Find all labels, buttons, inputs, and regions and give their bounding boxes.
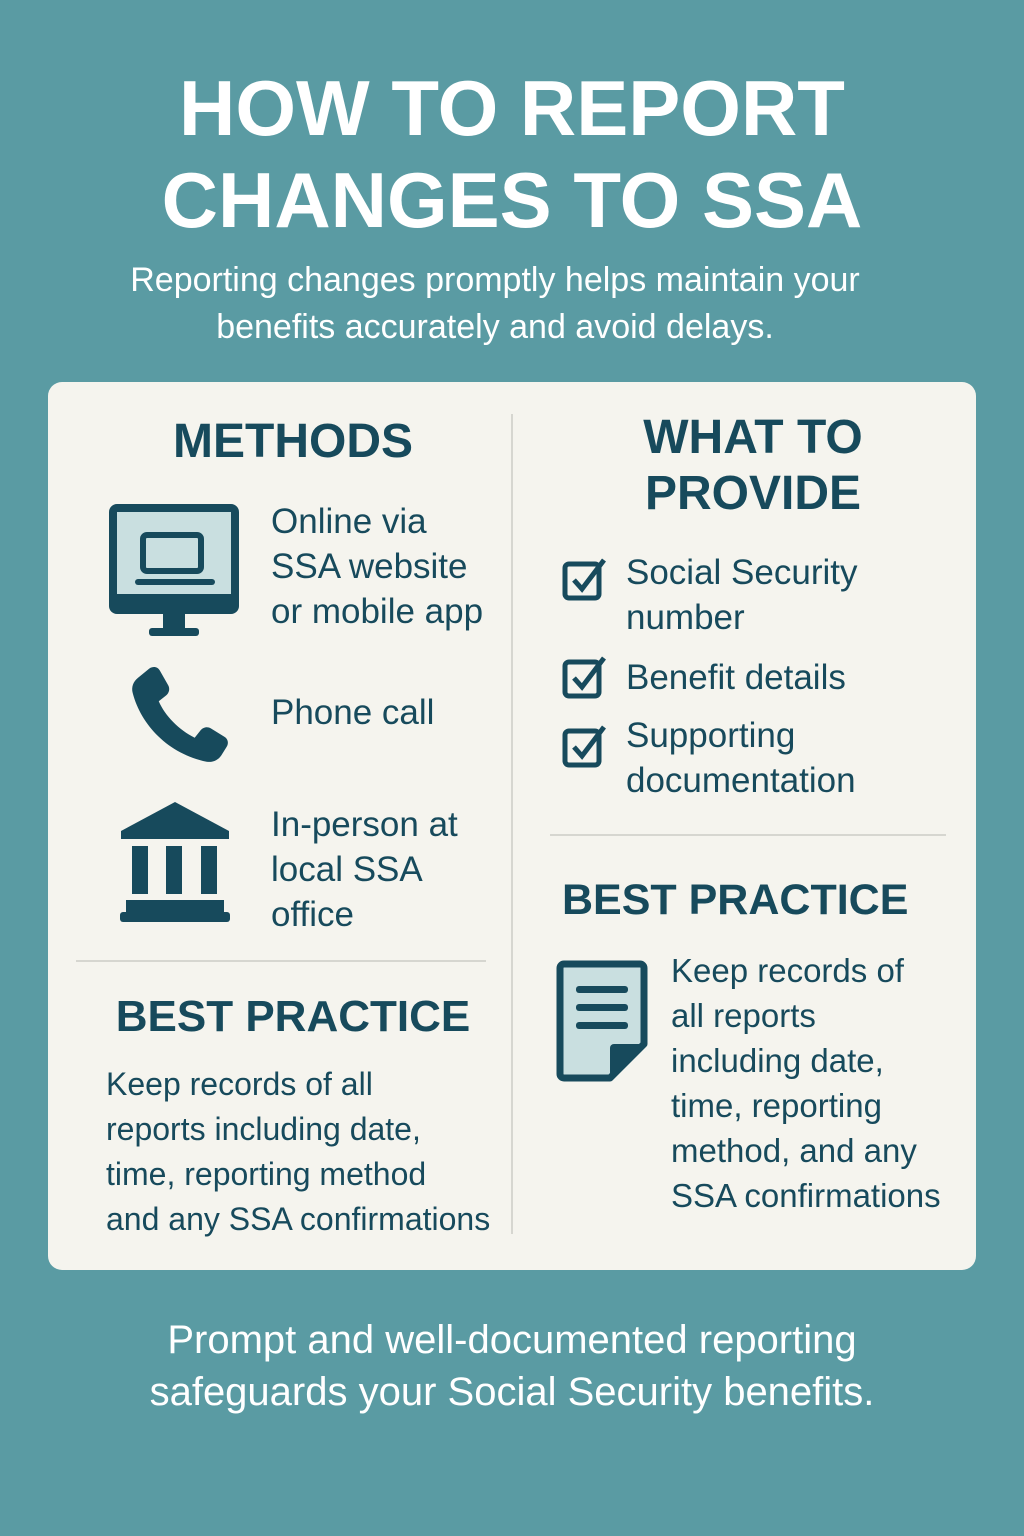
what to provide heading: PROVIDE: [645, 467, 861, 520]
text: phone: Phone call: [271, 693, 434, 732]
icon: phone: [132, 667, 228, 762]
text: in-person: [271, 805, 458, 934]
best practice left heading: BEST PRACTICE: [116, 992, 470, 1041]
check item: documentation: Supporting: [626, 716, 795, 755]
main panel: [48, 382, 976, 1270]
best practice left text: reports including date,: [106, 1111, 421, 1147]
methods heading: METHODS: [173, 415, 413, 468]
title: [162, 64, 862, 244]
title: HOW TO REPORT: [179, 64, 845, 152]
check item: benefit: Benefit details: [626, 658, 846, 697]
best practice right heading: BEST PRACTICE: [562, 876, 908, 924]
best practice right text: [671, 952, 941, 1214]
best practice left text: time, reporting method: [106, 1156, 426, 1192]
best practice right text: SSA confirmations: [671, 1177, 941, 1214]
what to provide heading: [643, 411, 863, 520]
best practice left text: and any SSA confirmations: [106, 1201, 490, 1237]
subtitle: [130, 261, 860, 346]
text: in-person: office: [271, 895, 354, 934]
icon: computer: [109, 504, 239, 636]
text: online: or mobile app: [271, 592, 483, 631]
best practice right text: including date,: [671, 1042, 884, 1079]
footer: [150, 1318, 874, 1414]
checklist: [562, 553, 858, 800]
text: online: SSA website: [271, 547, 468, 586]
best practice left text: Keep records of all: [106, 1066, 373, 1102]
check item: documentation: [562, 716, 856, 800]
icon: building: [120, 802, 230, 922]
best practice left text: [106, 1066, 490, 1237]
text: in-person: local SSA: [271, 850, 423, 889]
best practice right text: Keep records of: [671, 952, 904, 989]
text: in-person: In-person at: [271, 805, 458, 844]
check item: SSN: [562, 553, 858, 637]
best practice right text: method, and any: [671, 1132, 917, 1169]
text: online: Online via: [271, 502, 427, 541]
what to provide heading: WHAT TO: [643, 411, 863, 464]
icon: document: [556, 960, 648, 1082]
subtitle: benefits accurately and avoid delays.: [216, 308, 774, 346]
text: online: [271, 502, 483, 631]
best practice right text: all reports: [671, 997, 816, 1034]
footer: safeguards your Social Security benefits.: [150, 1370, 874, 1414]
check item: SSN: number: [626, 598, 745, 637]
check item: documentation: documentation: [626, 761, 856, 800]
title: CHANGES TO SSA: [162, 156, 862, 244]
subtitle: Reporting changes promptly helps maintain your: [130, 261, 860, 299]
check item: SSN: Social Security: [626, 553, 857, 592]
best practice right text: time, reporting: [671, 1087, 882, 1124]
footer: Prompt and well-documented reporting: [167, 1318, 857, 1362]
